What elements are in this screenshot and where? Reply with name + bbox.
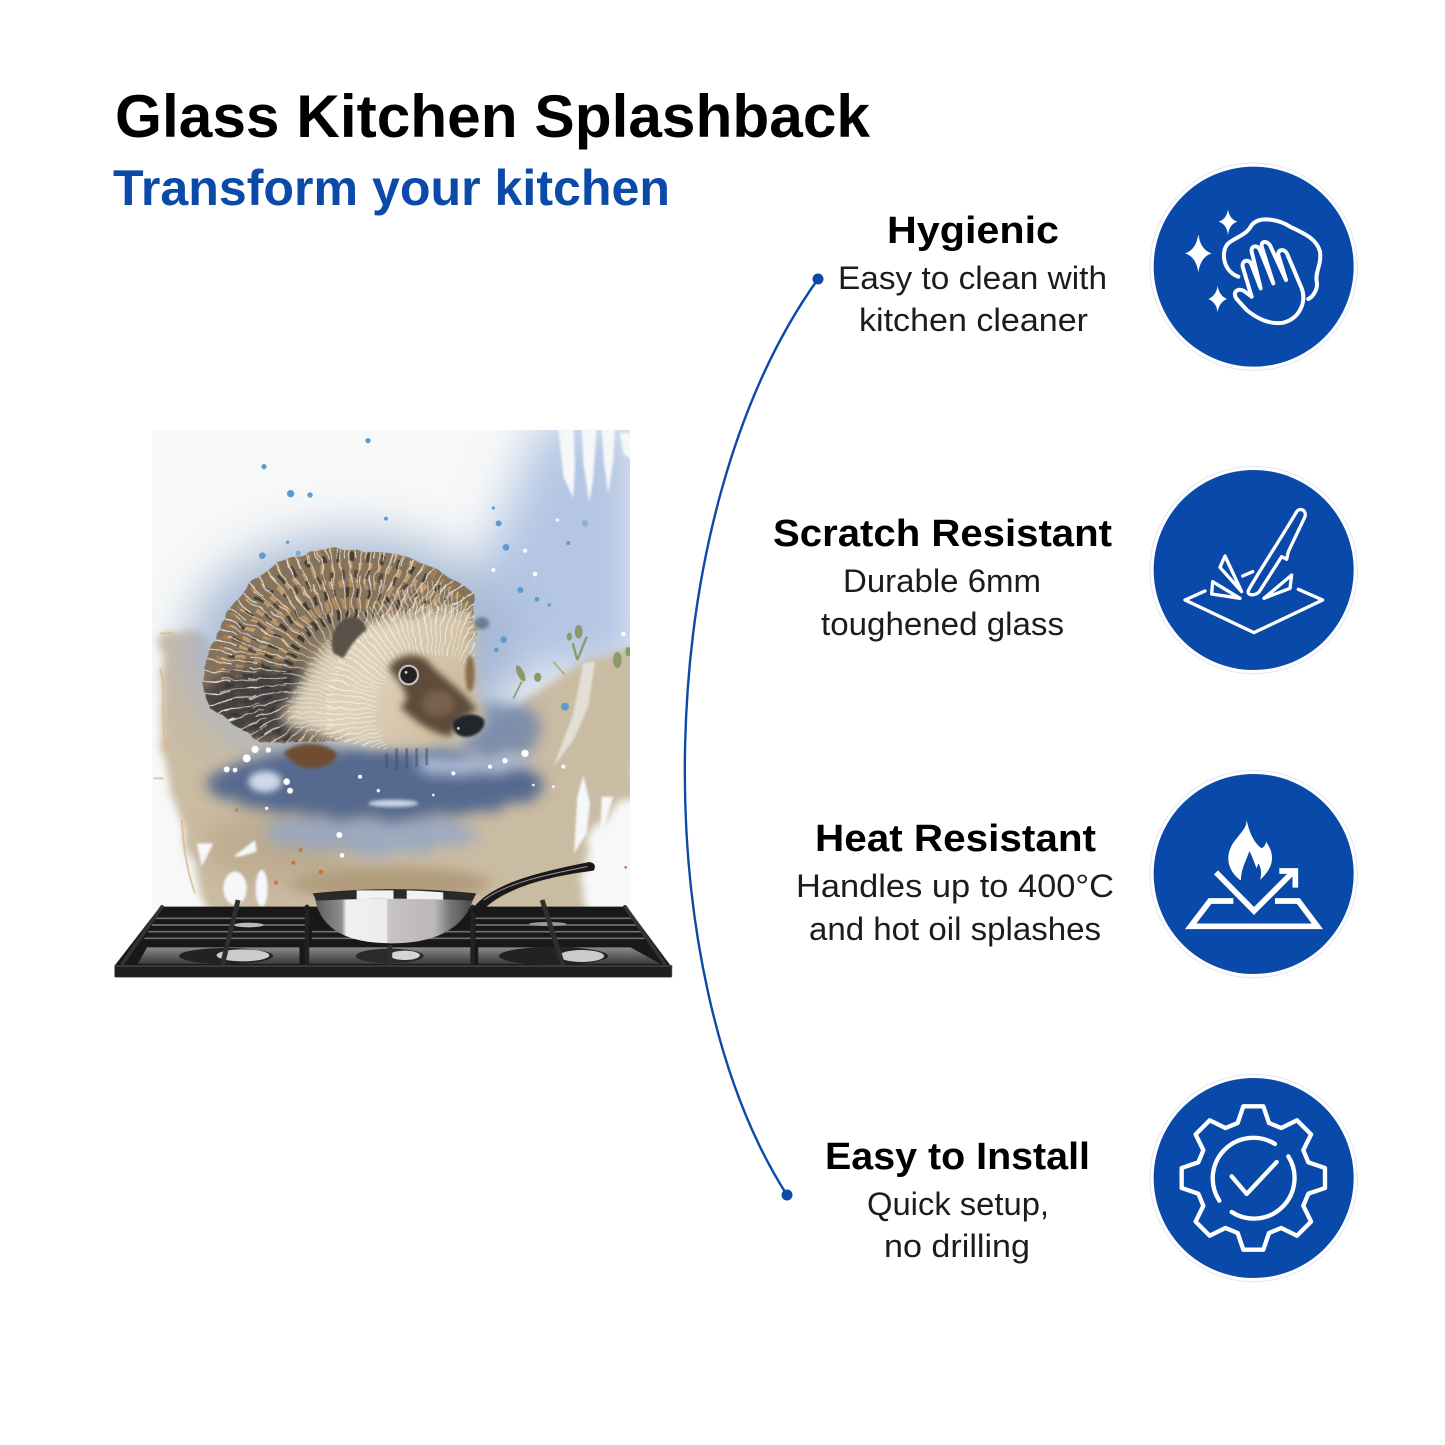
nose bbox=[453, 715, 484, 737]
feature text: Scratch Resistant: toughened glass bbox=[821, 606, 1064, 642]
hedgehog body spines bbox=[202, 546, 478, 744]
pan bowl bbox=[314, 895, 474, 943]
icon: hand wiping with sparkles bbox=[1150, 163, 1357, 370]
pot supports bbox=[222, 900, 563, 965]
icon: gear with check mark bbox=[1150, 1074, 1357, 1282]
white drips bbox=[197, 428, 632, 907]
feature text: Scratch Resistant bbox=[773, 513, 1112, 642]
feature text: Hygienic bbox=[838, 210, 1107, 338]
panel: hedgehog splashback painting bbox=[152, 420, 640, 917]
water bbox=[210, 518, 626, 858]
feature text: Easy to Install bbox=[825, 1136, 1090, 1264]
front paw bbox=[283, 744, 337, 768]
icon: flame over heat resistant surface bbox=[1150, 770, 1357, 978]
feature text: Easy to Install: Quick setup, bbox=[867, 1186, 1049, 1222]
feature text: Hygienic: kitchen cleaner bbox=[859, 302, 1088, 338]
feature text: Heat Resistant bbox=[796, 818, 1114, 947]
panel: gas hob with pan bbox=[114, 862, 672, 977]
feature text: Heat Resistant: and hot oil splashes bbox=[809, 911, 1101, 947]
feature text: Heat Resistant: Handles up to 400°C bbox=[796, 868, 1114, 904]
connector curve bbox=[685, 274, 824, 1200]
ear bbox=[332, 617, 367, 658]
feature text: Hygienic: Easy to clean with bbox=[838, 260, 1107, 296]
feature text: Easy to Install: Easy to Install bbox=[825, 1136, 1090, 1178]
burners bbox=[179, 922, 608, 965]
feature text: Scratch Resistant: Durable 6mm bbox=[843, 563, 1041, 599]
pan handle bbox=[471, 862, 595, 912]
feature text: Scratch Resistant: Scratch Resistant bbox=[773, 513, 1112, 555]
paint specks bbox=[259, 438, 588, 711]
eye bbox=[398, 665, 419, 685]
title: Glass Kitchen Splashback bbox=[115, 83, 871, 150]
hob frame bbox=[115, 907, 670, 965]
hedgehog bbox=[202, 546, 492, 770]
feature text: Heat Resistant: Heat Resistant bbox=[815, 818, 1096, 860]
eye mask bbox=[388, 655, 477, 737]
feature text: Hygienic: Hygienic bbox=[887, 210, 1059, 252]
plants bbox=[513, 626, 631, 698]
glass surface bbox=[138, 947, 661, 964]
grates bbox=[123, 907, 664, 963]
subtitle: Transform your kitchen bbox=[113, 160, 670, 216]
icon: knife scratching glass bbox=[1150, 466, 1357, 674]
hedgehog face bbox=[274, 580, 492, 770]
feature text: Easy to Install: no drilling bbox=[884, 1228, 1030, 1264]
paint drips left bbox=[153, 633, 195, 893]
